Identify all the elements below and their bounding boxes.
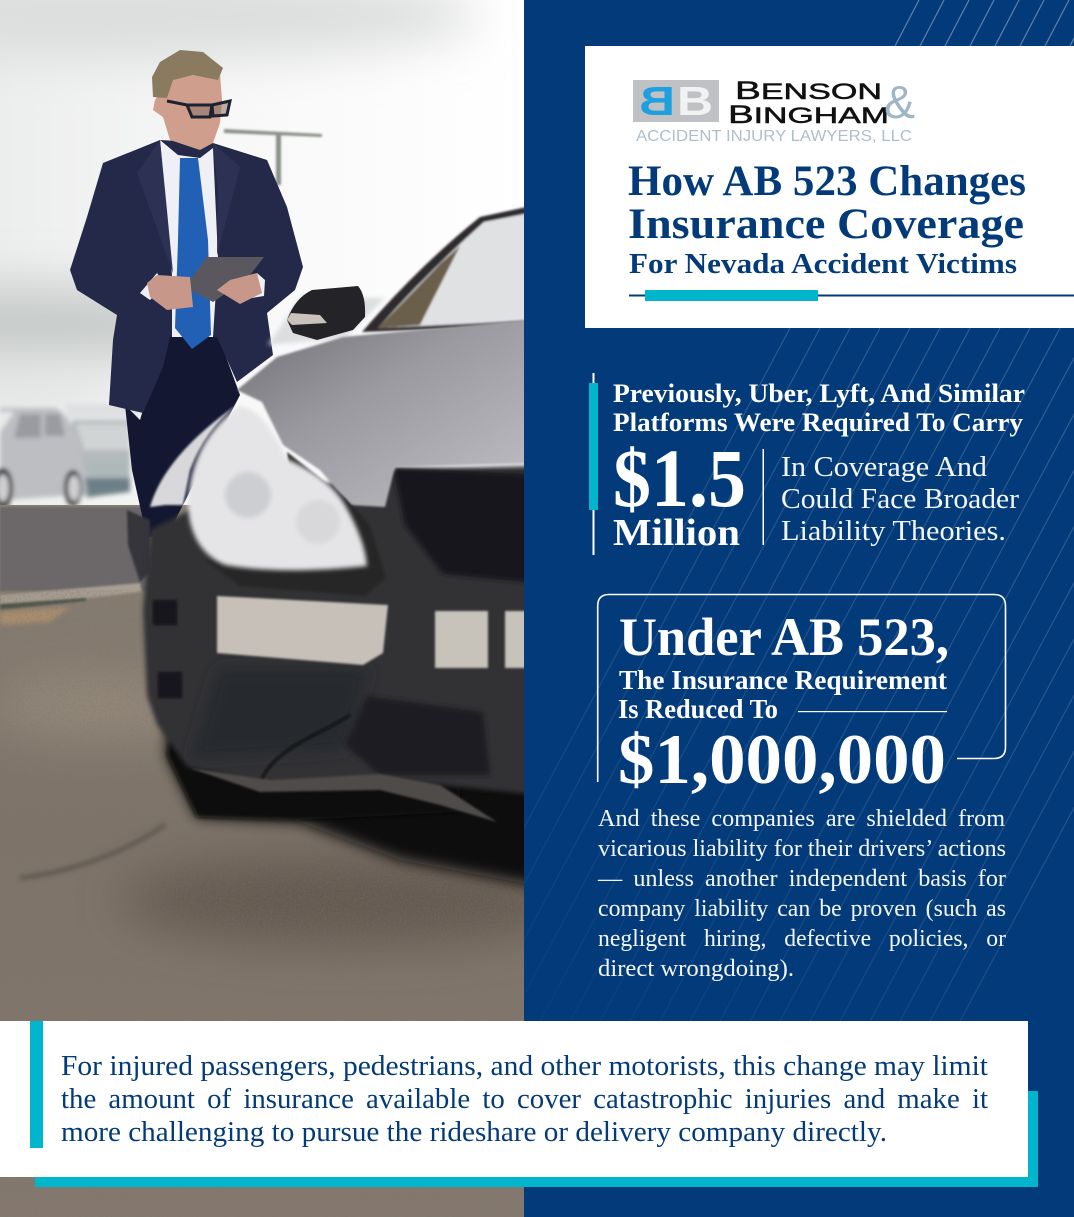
man: lapels [137, 140, 240, 273]
title [628, 158, 1026, 280]
intro text: Platforms Were Required To Carry [613, 407, 1023, 437]
intro text [613, 378, 1025, 437]
accent bar [589, 373, 598, 555]
dark far wheel area [127, 510, 150, 582]
logo ampersand: & [884, 76, 915, 128]
title rule [629, 290, 1074, 301]
callout subheading [618, 665, 947, 724]
man [70, 50, 303, 538]
logo name: B INGHAM [728, 101, 889, 129]
callout amount: $1,000,000 [618, 721, 946, 799]
car: headlight [188, 406, 367, 570]
bottom callout text: For injured passengers, pedestrians, and other motorists, this change may limit [61, 1050, 988, 1082]
decorative stripes top [895, 0, 1074, 46]
sky [0, 0, 524, 520]
car: white trim [150, 404, 238, 507]
explanation paragraph: — unless another independent basis for [597, 866, 1006, 892]
header white panel [585, 46, 1074, 328]
explanation paragraph: company liability can be proven (such as [598, 896, 1006, 922]
car: broken lower edge [190, 768, 497, 822]
utility pole [224, 129, 322, 185]
divider [762, 449, 764, 545]
AB 523 callout [598, 594, 1006, 799]
stat description [781, 451, 1019, 547]
man: jacket [70, 140, 303, 413]
car: lower grille [345, 696, 490, 775]
callout subheading: The Insurance Requirement [619, 665, 947, 695]
car: clips [153, 600, 182, 698]
man: shirt cuffs [140, 273, 265, 300]
bottom callout panel [0, 1021, 1038, 1187]
car: grille [393, 466, 524, 584]
teal offset shadow [35, 1091, 1038, 1187]
callout outline [598, 594, 1006, 782]
road surface [0, 505, 580, 1217]
man: hair [152, 50, 223, 98]
intro text: Previously, Uber, Lyft, And Similar [613, 378, 1025, 408]
man: tablet [185, 257, 264, 302]
man: hands [147, 273, 262, 310]
title: How AB 523 Changes [628, 158, 1026, 205]
explanation paragraph [597, 806, 1006, 982]
man: shirt [160, 140, 218, 337]
man: glasses [167, 101, 230, 117]
previous requirement section [589, 373, 1025, 555]
car: small beam pieces [435, 611, 535, 668]
callout heading: Under AB 523, [619, 607, 949, 667]
logo mark [633, 78, 719, 124]
title: For Nevada Accident Victims [629, 248, 1017, 280]
stat description: Liability Theories. [781, 515, 1006, 547]
photo: man inspecting damaged car [0, 0, 580, 1217]
logo mark: B [639, 78, 675, 124]
callout subheading: Is Reduced To [618, 694, 778, 724]
car: tyre and shadow [158, 729, 524, 893]
logo mark: B [677, 78, 713, 124]
man: face [153, 73, 222, 150]
teal accent bar [30, 1021, 43, 1148]
car: headlight rim [205, 452, 386, 596]
car: bumper [143, 465, 560, 797]
bottom callout text [61, 1050, 988, 1148]
car: wire [262, 715, 350, 778]
man: trousers [125, 335, 240, 538]
car body [143, 465, 560, 890]
stat: $1.5 million: Million [613, 512, 740, 554]
logo name [728, 77, 889, 129]
bottom callout text: the amount of insurance available to cover catastrophic injuries and make it [61, 1083, 988, 1115]
car: dark area below beam [197, 670, 363, 758]
explanation paragraph: vicarious liability for their drivers’ actions [598, 836, 1006, 862]
explanation paragraph: And these companies are shielded from [598, 806, 1005, 832]
explanation paragraph: negligent hiring, defective policies, or [598, 926, 1006, 952]
background cars [0, 404, 136, 508]
car: hood [237, 318, 545, 507]
navy background panel [524, 0, 1074, 1217]
decorative stripes middle [524, 328, 1074, 1040]
logo tagline: ACCIDENT INJURY LAWYERS, LLC [636, 128, 912, 145]
side mirror [287, 286, 365, 340]
car: silver bumper beam [217, 596, 388, 665]
stat: $1.5 million: $1.5 [613, 432, 746, 524]
logo name: B ENSON [735, 77, 882, 105]
title: Insurance Coverage [628, 201, 1024, 248]
explanation paragraph: direct wrongdoing). [598, 956, 794, 982]
stat description: Could Face Broader [781, 483, 1019, 515]
car windshield and roof [361, 206, 524, 334]
stat description: In Coverage And [781, 451, 988, 483]
bottom callout text: more challenging to pursue the rideshare or delivery company directly. [61, 1116, 887, 1148]
distant car body behind mirror [268, 298, 385, 345]
mirror indicator [287, 313, 327, 325]
white panel [0, 1021, 1028, 1177]
logo [633, 76, 915, 145]
man: tie [175, 158, 211, 349]
